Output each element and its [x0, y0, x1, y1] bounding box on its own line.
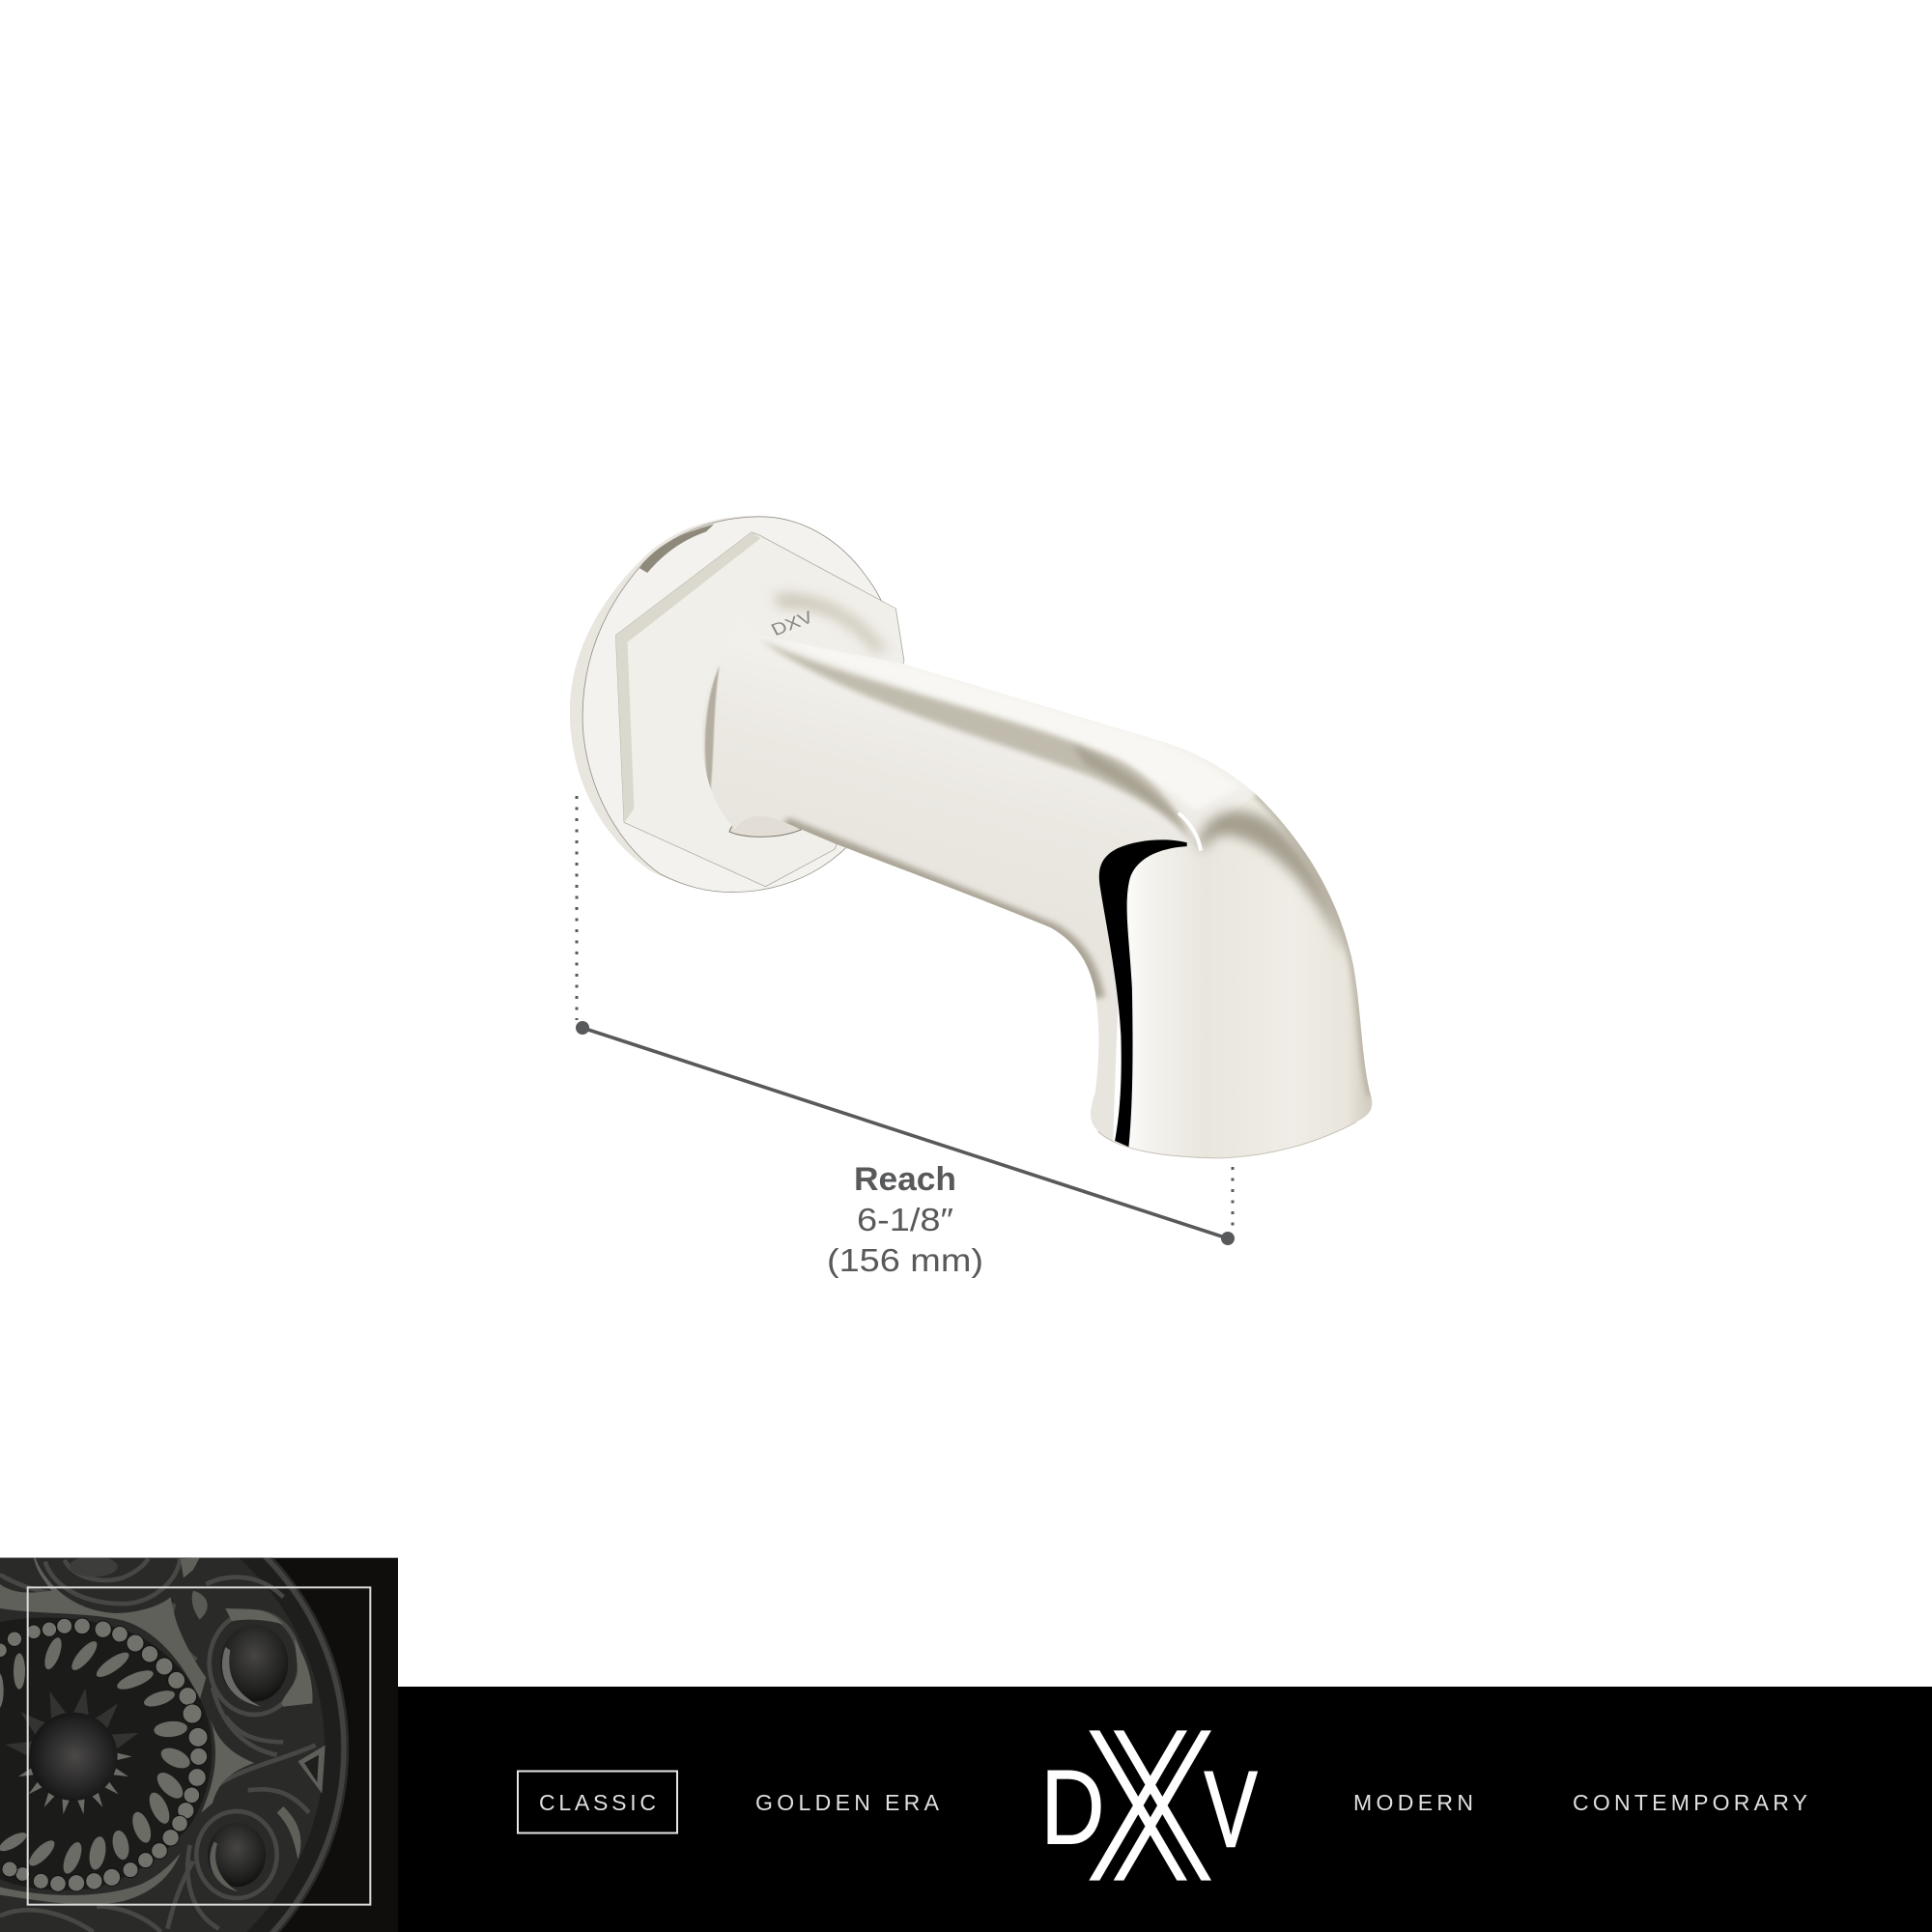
spout shading: [705, 636, 1383, 1167]
neck crescent shading: [705, 666, 720, 794]
wall flange front face: [582, 517, 903, 893]
light gap beside lower scroll: [277, 1806, 300, 1860]
era scale: [518, 1772, 1807, 1833]
sunburst spikes, lower half: [17, 1752, 132, 1815]
black reflection stripe: [1099, 839, 1187, 1147]
light gap under bead ring: [0, 1853, 181, 1905]
ornament panel: [0, 1557, 398, 1932]
era: contemporary: CONTEMPORARY: [1573, 1790, 1807, 1815]
wall flange back edge: [570, 516, 903, 893]
reach heading: Reach: [854, 1161, 956, 1198]
hexagonal escutcheon: [615, 532, 904, 887]
sunburst dark field: [0, 1618, 212, 1890]
disc base: [0, 1557, 350, 1932]
lower neck disc: [729, 815, 802, 837]
right dotted guide: [1231, 1167, 1235, 1227]
reach label: [827, 1161, 983, 1278]
top right leaf: [192, 1591, 208, 1620]
nose surface: [1113, 852, 1372, 1155]
scroll relief strokes: [0, 1558, 316, 1932]
era: modern: MODERN: [1353, 1790, 1473, 1815]
hexagon bevel: [615, 532, 760, 822]
triangle inner: [304, 1755, 319, 1782]
spout body: [701, 616, 1372, 1158]
logo letter D: D: [1040, 1747, 1105, 1866]
product illustration: tub spout: [570, 516, 1383, 1167]
central boss: [29, 1713, 118, 1801]
sunburst petals: [4, 1687, 141, 1757]
flange rim highlight: [639, 525, 714, 573]
top scroll ornament: [70, 1556, 118, 1577]
inner rim shadow: [239, 1557, 340, 1932]
DXV logo: [1040, 1730, 1258, 1881]
light gap between scrolls: [201, 1717, 254, 1813]
upper ridge highlight: [902, 664, 1230, 808]
ridge shadow end: [1075, 746, 1186, 829]
long ridge shadow: [760, 639, 1195, 846]
left dotted guide: [576, 796, 578, 1020]
ornament white frame: [28, 1587, 370, 1905]
light gap above bead ring: [0, 1558, 206, 1700]
left end dot: [576, 1021, 589, 1035]
spout outlet rim: [1098, 1122, 1356, 1158]
lower boss crescent: [210, 1842, 239, 1891]
reach millimetres: (156 mm): [827, 1242, 983, 1278]
lower edge shadow: [785, 822, 1098, 998]
small brand mark on flange: DXV: [768, 609, 817, 640]
logo letter V: V: [1205, 1748, 1258, 1870]
arch shading on nose: [1198, 811, 1348, 956]
hexagon shoulder shadow: [774, 592, 888, 652]
dimension: reach: [576, 796, 1235, 1245]
lower right boss: [208, 1833, 266, 1888]
leaves around sunburst: [0, 1635, 193, 1876]
bead ring: [0, 1618, 208, 1891]
upper right boss: [220, 1636, 288, 1702]
infographic canvas: [0, 516, 1932, 1932]
panel background: [0, 1558, 398, 1932]
rim line: [263, 1558, 346, 1932]
right triangle motif: [298, 1746, 326, 1794]
spout notch highlight: [1179, 813, 1201, 850]
light gap top of upper boss: [225, 1608, 283, 1625]
black footer band: [398, 1687, 1932, 1932]
ornament artwork: [0, 1557, 350, 1932]
right end dot: [1221, 1232, 1235, 1245]
light gap beside upper boss: [282, 1639, 313, 1707]
era: classic: CLASSIC: [539, 1790, 656, 1815]
upper right crescent: [222, 1647, 261, 1707]
dimension line: [582, 1028, 1228, 1238]
reach inches: 6-1/8″: [857, 1202, 953, 1237]
logo X double strokes: [1089, 1730, 1211, 1881]
active era box: [518, 1772, 677, 1833]
light wedge top: [181, 1558, 200, 1577]
right edge shading: [1256, 794, 1371, 1096]
era: golden era: GOLDEN ERA: [755, 1790, 940, 1815]
